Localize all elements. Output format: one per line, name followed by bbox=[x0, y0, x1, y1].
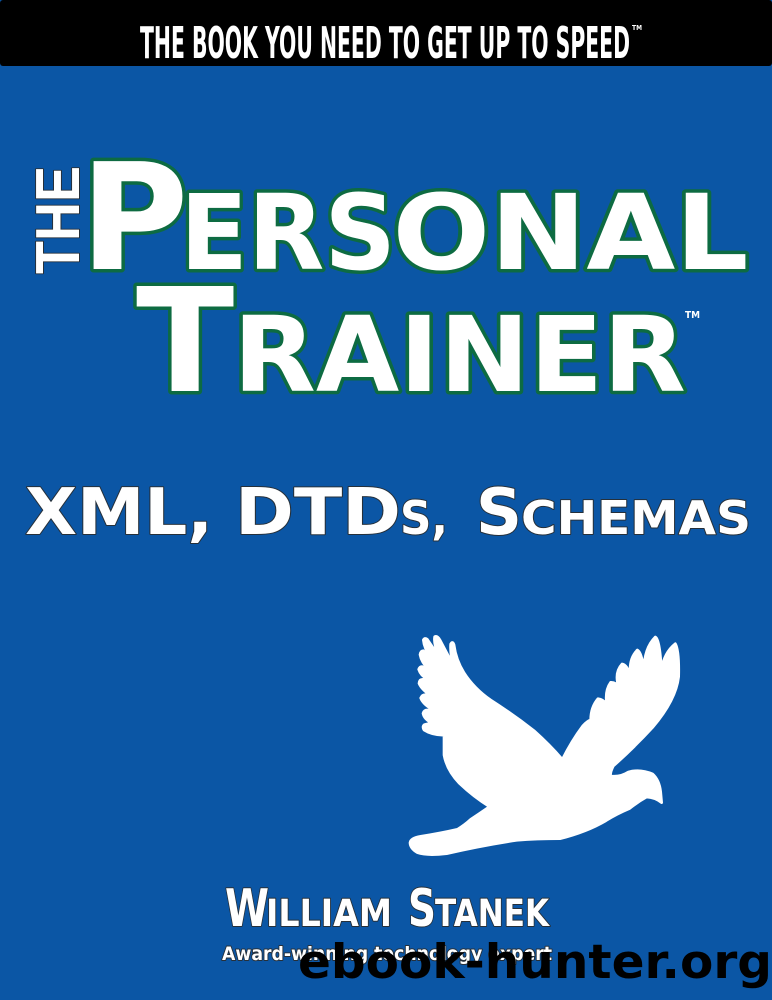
subtitle: S bbox=[476, 476, 522, 550]
top banner bbox=[0, 0, 772, 69]
subtitle bbox=[25, 476, 751, 550]
author credential: Award-winning technology expert bbox=[222, 943, 552, 965]
title line: personal bbox=[80, 132, 748, 304]
title line: trainer bbox=[136, 257, 686, 425]
subtitle: CHEMAS bbox=[521, 491, 751, 545]
banner trademark: TM bbox=[632, 24, 642, 32]
author name: W bbox=[225, 879, 269, 939]
author name: S bbox=[408, 879, 436, 939]
subtitle: DTD bbox=[235, 476, 401, 550]
author name bbox=[225, 879, 550, 939]
title line: personal: ONAL bbox=[392, 172, 748, 294]
subtitle: XML, bbox=[25, 476, 213, 550]
title trademark: TM bbox=[685, 310, 700, 321]
watermark: ebook-hunter.org bbox=[298, 935, 772, 990]
title line: trainer: T bbox=[136, 257, 234, 425]
title line: personal: ERS bbox=[180, 172, 396, 294]
icon: white dove bbox=[410, 636, 679, 855]
series title bbox=[24, 132, 748, 425]
title line: personal: P bbox=[80, 132, 188, 304]
author name: TANEK bbox=[435, 892, 550, 935]
title line: trainer: RAINER bbox=[233, 294, 686, 416]
author name: ILLIAM bbox=[266, 892, 392, 935]
vertical word: the: THE bbox=[24, 166, 93, 274]
subtitle: S, bbox=[400, 491, 448, 545]
